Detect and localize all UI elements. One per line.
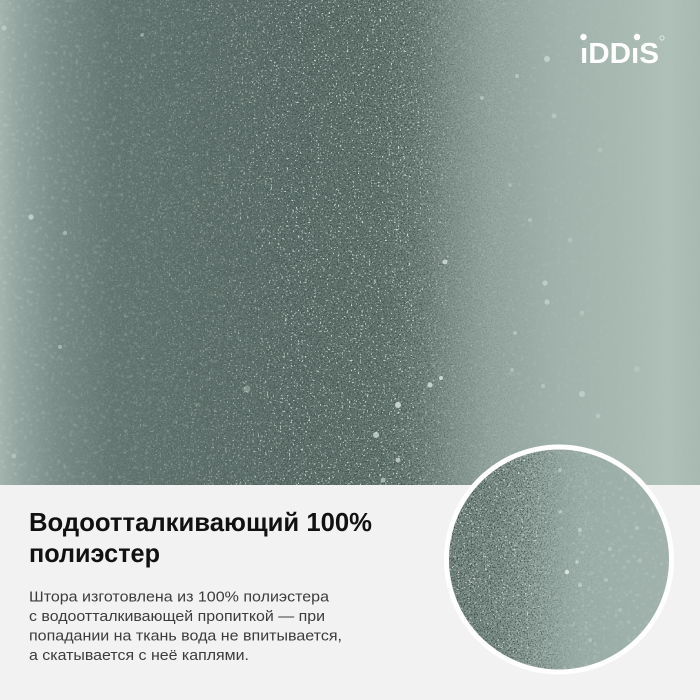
body text: Штора изготовлена из 100% полиэстера [29, 588, 330, 606]
heading: Водоотталкивающий 100% [29, 507, 372, 537]
logo: IDDIS: ıDDıS [580, 38, 659, 70]
body text: с водоотталкивающей пропиткой — при [29, 608, 325, 625]
heading: полиэстер [29, 538, 160, 568]
heading [29, 507, 372, 568]
body text: а скатывается с неё каплями. [29, 647, 249, 664]
callout: magnified fabric circle [440, 440, 680, 680]
panel: fabric photo [0, 0, 700, 485]
body text [29, 588, 342, 664]
panel: text area [0, 485, 700, 700]
body text: попадании на ткань вода не впитывается, [29, 628, 342, 644]
